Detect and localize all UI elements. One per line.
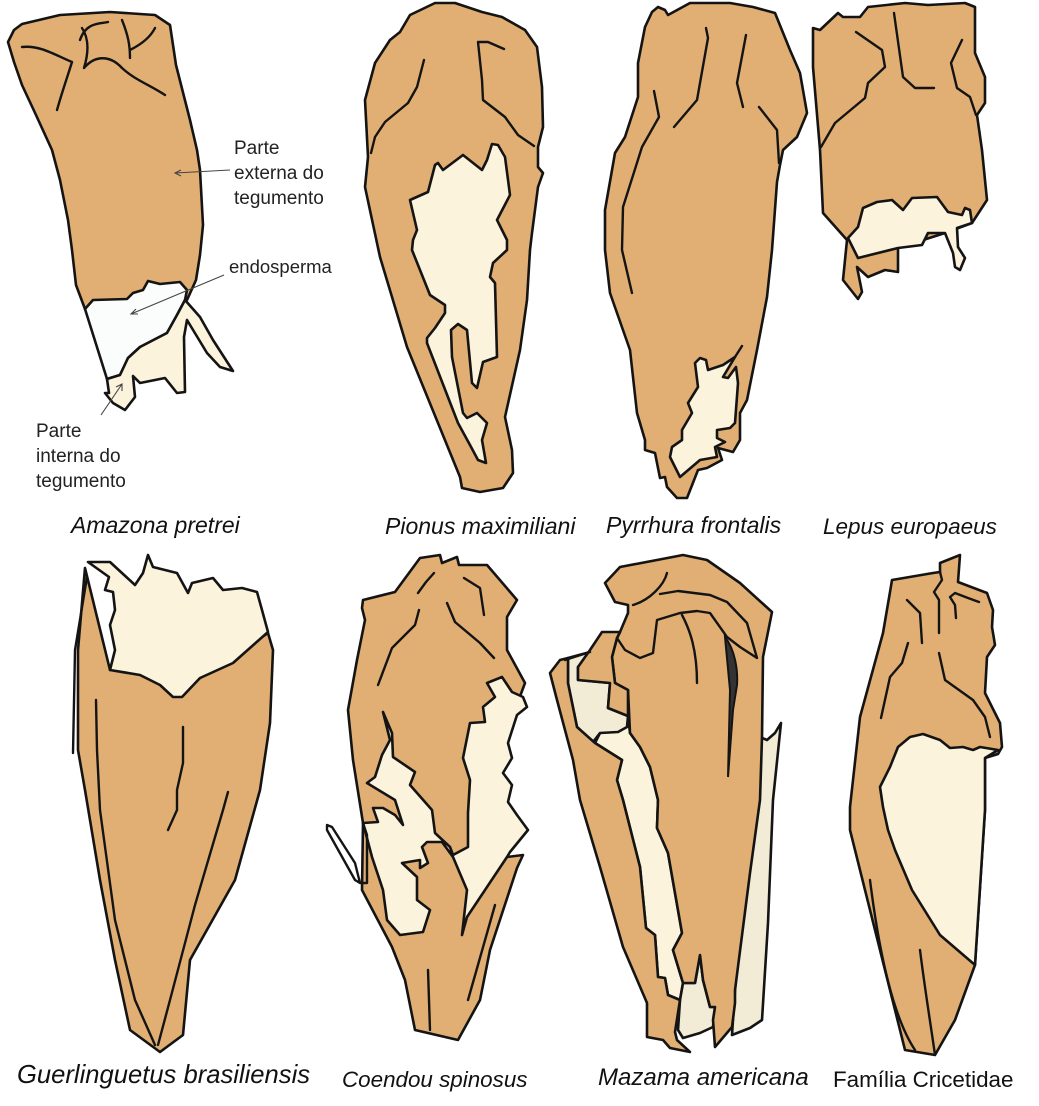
species name: Guerlinguetus brasiliensis: Guerlinguetus brasiliensis [17,1061,310,1089]
label: parte interna do tegumento: Parte [36,421,81,442]
label: parte externa do tegumento: Parte [234,138,279,159]
seed: Amazona pretrei [8,12,333,492]
seed: Mazama americana [550,555,781,1052]
label: parte externa do tegumento [234,138,324,209]
arrow: interna [101,384,122,415]
seed: Familia Cricetidae [850,555,1002,1055]
arrow: externa [175,170,230,176]
species name: Coendou spinosus: Coendou spinosus [342,1067,527,1092]
species name: Lepus europaeus: Lepus europaeus [823,514,997,539]
species name: Pyrrhura frontalis: Pyrrhura frontalis [606,512,782,538]
species name: Familia Cricetidae: Família Cricetidae [833,1067,1013,1092]
seed coat right strip [732,723,781,1035]
seed: Lepus europaeus [813,3,987,299]
label: parte externa do tegumento: externa do [234,163,324,184]
label: parte interna do tegumento: tegumento [36,471,126,492]
seed: Pionus maximiliani [365,3,543,492]
seed coat left pale patch [568,652,628,742]
seed coat bottom pale patch [678,955,715,1038]
species name: Amazona pretrei: Amazona pretrei [69,512,241,538]
arrow: endosperma [131,275,224,314]
species name: Mazama americana: Mazama americana [598,1064,809,1091]
dark wedge [725,637,737,777]
label: endosperma: endosperma [229,256,333,277]
seed: Guerlinguetus brasiliensis [73,555,273,1052]
label: parte externa do tegumento: tegumento [234,188,324,209]
pale endosperm strip [595,716,683,1000]
seed: Pyrrhura frontalis [605,3,807,498]
species name: Pionus maximiliani: Pionus maximiliani [385,513,576,539]
label: parte interna do tegumento [36,421,126,492]
label: parte interna do tegumento: interna do [36,446,121,467]
seed: Coendou spinosus [327,555,528,1040]
